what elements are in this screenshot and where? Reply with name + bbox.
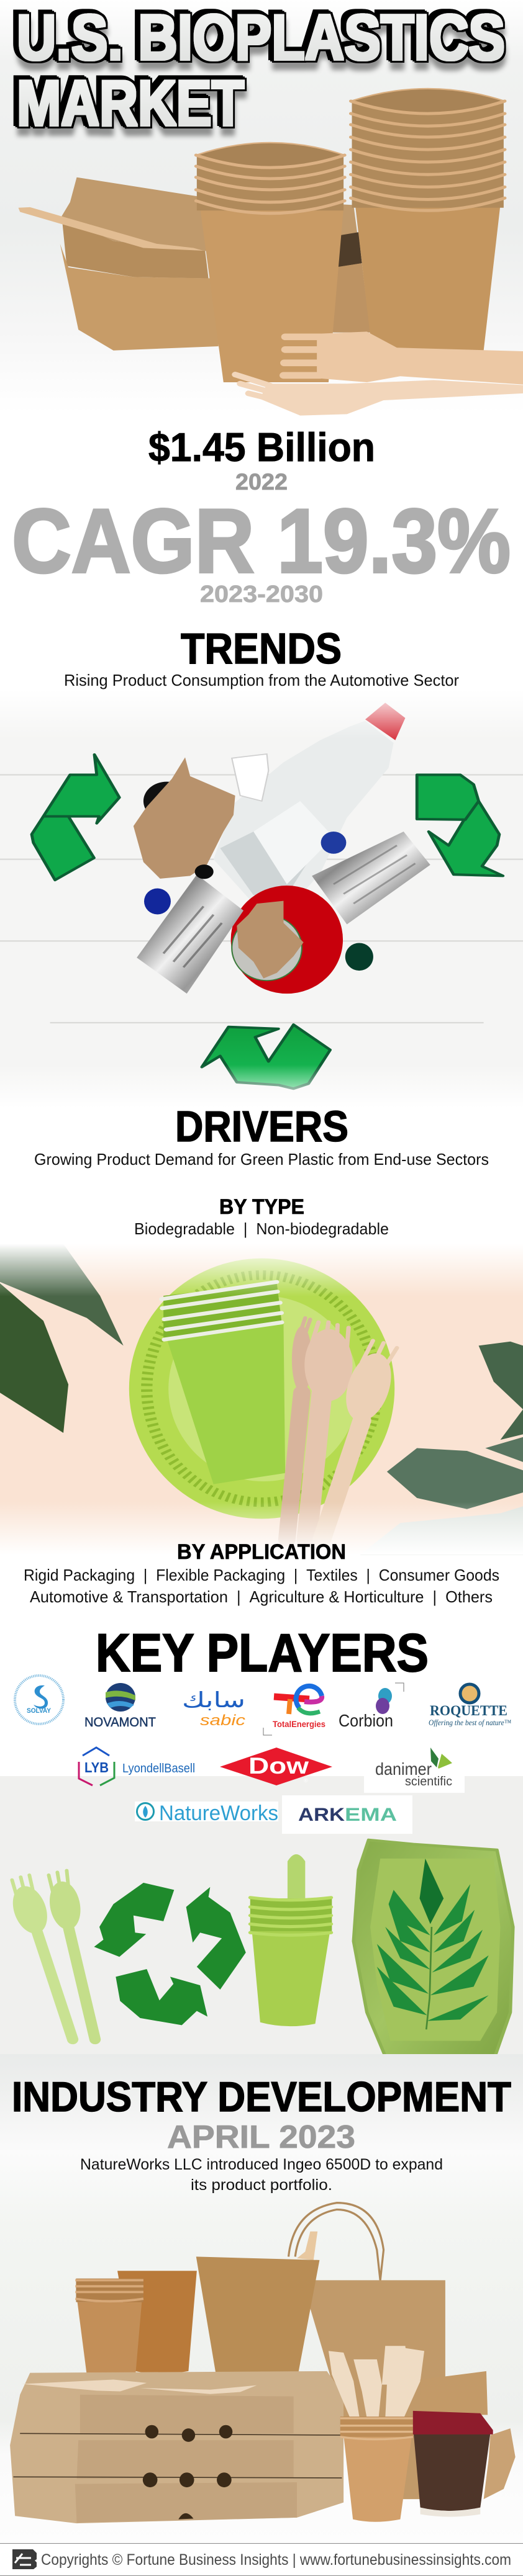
market size value: $1.45 Billion <box>148 424 375 470</box>
left cup stack <box>196 143 345 382</box>
recycling photo <box>0 689 523 1108</box>
logo: LyondellBasell: LYB <box>84 1759 109 1775</box>
plastic bottle <box>214 702 405 904</box>
corrugated cup <box>117 2271 197 2374</box>
development text line 1: NatureWorks LLC introduced Ingeo 6500D to expand <box>80 2156 443 2173</box>
leaves right <box>360 1342 523 1555</box>
photo: green plate, cup and forks <box>0 1244 523 1555</box>
icon: recycling arrow right <box>417 774 503 876</box>
logo: Arkema <box>282 1795 412 1834</box>
logo: SABIC: سابك <box>182 1688 245 1713</box>
photo: kraft packaging <box>0 2054 523 2543</box>
logo: Danimer Scientific: scientific <box>405 1775 452 1788</box>
green tray <box>353 1840 513 2060</box>
logo: Arkema: EMA <box>345 1805 397 1825</box>
logo: Solvay: SOLVAY <box>27 1707 52 1715</box>
leaves left <box>0 1244 124 1433</box>
green cup stack <box>161 1282 285 1484</box>
wooden fork front <box>235 375 523 416</box>
forks in cup <box>329 2346 424 2418</box>
drivers heading: DRIVERS <box>175 1102 348 1151</box>
logo: Dow: Dow <box>248 1753 309 1779</box>
kraft tray back <box>61 177 370 333</box>
title <box>17 2 505 140</box>
logo: Roquette: Offering the best of nature™ <box>429 1718 511 1727</box>
small kraft cup <box>340 2417 413 2522</box>
wooden cutlery on box <box>22 2379 257 2394</box>
logo: Arkema: ARK <box>298 1805 345 1825</box>
logo: Corbion <box>339 1688 393 1730</box>
title: MARKET <box>17 68 244 140</box>
logo: Roquette: ROQUETTE <box>430 1703 507 1718</box>
logo: TotalEnergies: TotalEnergies <box>273 1719 325 1729</box>
logo: Novamont: NOVAMONT <box>84 1715 156 1730</box>
logo: TotalEnergies <box>263 1683 404 1735</box>
logo: Dow: ® <box>304 1777 308 1784</box>
by application list line 2: Automotive & Transportation | Agriculture & Horticulture | Others <box>30 1587 493 1606</box>
drivers text: Growing Product Demand for Green Plastic from End-use Sectors <box>34 1150 489 1169</box>
crumpled paper in lid <box>237 901 304 979</box>
logo: SABIC <box>182 1688 245 1729</box>
hero photo: kraft cups, trays and forks <box>0 0 523 416</box>
red lid <box>231 886 343 994</box>
coffee cup with red lid <box>413 2411 493 2517</box>
base year: 2022 <box>235 469 288 495</box>
green leaf <box>377 1859 489 2029</box>
key players heading: KEY PLAYERS <box>96 1623 429 1683</box>
by application list line 1: Rigid Packaging | Flexible Packaging | Textiles | Consumer Goods <box>24 1566 499 1584</box>
logo: Solvay <box>15 1676 63 1724</box>
photo: green cutlery, felt recycling symbol, cup and tray <box>0 1776 523 2086</box>
development date: APRIL 2023 <box>167 2119 355 2155</box>
footer <box>0 2543 523 2576</box>
paper bag <box>289 2203 445 2499</box>
lime cup <box>250 1854 332 2026</box>
kraft tray middle <box>61 216 209 279</box>
by type list: Biodegradable | Non-biodegradable <box>134 1219 389 1238</box>
logo: Danimer Scientific: danimer <box>375 1759 432 1779</box>
logo: Roquette <box>429 1684 511 1727</box>
logo: Corbion: Corbion <box>339 1711 393 1730</box>
right cup stack <box>351 89 505 351</box>
trends heading: TRENDS <box>181 624 342 673</box>
logo: LyondellBasell: LyondellBasell <box>122 1762 195 1775</box>
wooden forks <box>287 1318 399 1540</box>
logo: NatureWorks: NatureWorks <box>159 1802 278 1825</box>
bowls stack <box>420 2371 488 2415</box>
green plate <box>129 1259 394 1519</box>
wooden sticks in tray <box>19 207 204 251</box>
kraft tray front <box>60 244 219 351</box>
dark hole behind paper <box>143 782 190 820</box>
by type heading: BY TYPE <box>219 1195 304 1219</box>
logo: Dow <box>220 1748 332 1785</box>
development text line 2: its product portfolio. <box>191 2176 332 2194</box>
icon: recycling arrow bottom <box>202 1025 330 1088</box>
wooden stick <box>297 2232 317 2260</box>
tray shadow strip <box>336 232 362 267</box>
trends text: Rising Product Consumption from the Automotive Sector <box>64 671 459 689</box>
left tin can <box>137 874 243 994</box>
forecast period: 2023-2030 <box>200 581 323 608</box>
small tray <box>484 2428 516 2499</box>
kraft food box <box>196 2256 319 2381</box>
bottle caps <box>144 832 373 971</box>
logo: LyondellBasell <box>79 1748 195 1785</box>
by application heading: BY APPLICATION <box>177 1540 346 1564</box>
logo: Danimer Scientific <box>364 1748 465 1793</box>
white band behind logos <box>0 1674 523 1776</box>
kraft cup <box>75 2279 143 2379</box>
felt recycling symbol <box>94 1883 246 2025</box>
logo: Novamont <box>84 1683 156 1730</box>
light bulb <box>232 754 268 801</box>
crumpled paper <box>134 757 235 879</box>
right tin can <box>312 832 430 925</box>
icon: recycling arrow left <box>32 755 119 880</box>
forks <box>7 1870 95 2039</box>
wooden fork back <box>283 331 523 385</box>
pizza boxes <box>10 2371 343 2523</box>
icon: Fortune Business Insights logo <box>12 2549 37 2569</box>
logo: SABIC: sabic <box>200 1712 245 1729</box>
